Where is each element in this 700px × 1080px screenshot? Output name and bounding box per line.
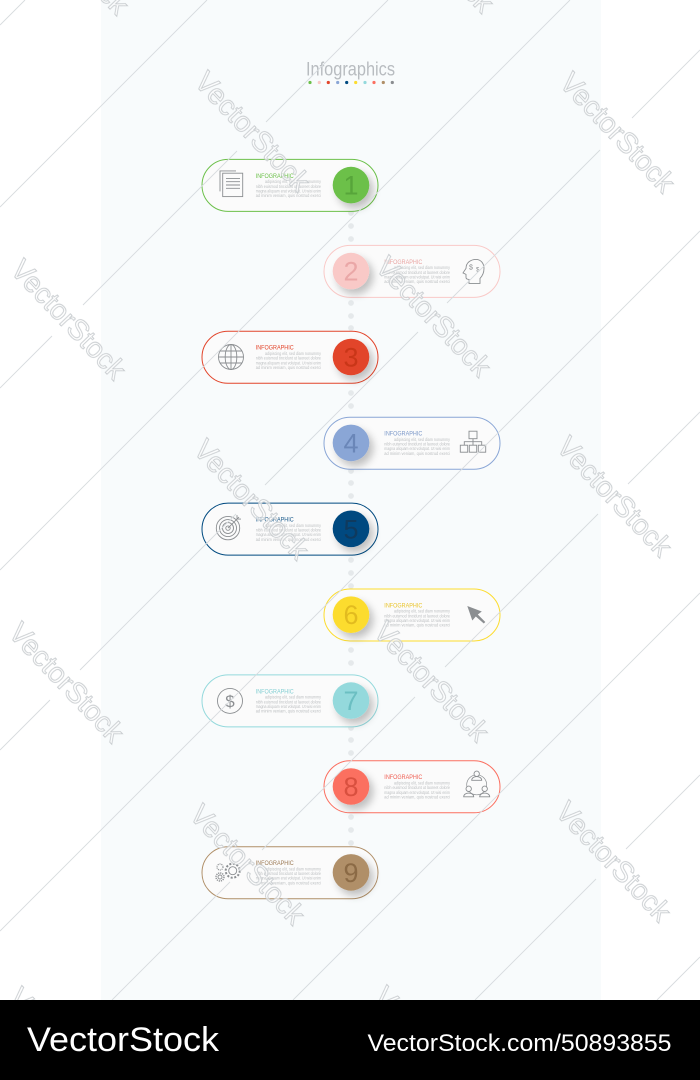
body text 9: adipiscing elit, sed diam nonummy [265,866,322,871]
watermark text repeats: VectorStock [550,431,678,564]
number badge 9 [333,854,369,891]
watermark text repeats: VectorStock [183,799,311,932]
number badge 4 [333,425,369,461]
panel: step 3 [202,331,378,383]
icon: team circle [464,771,490,797]
icon: gears [216,864,240,881]
body text 2: magna aliquam erat volutpat. Ut wisi enim [384,274,450,279]
icon: cursor arrow [467,606,485,624]
number badge 6 [333,596,369,633]
body text 9: nibh euismod tincidunt ut laoreet dolore [256,871,321,876]
icon: head with dollars [463,259,484,283]
number badge 3: 3 [343,342,359,372]
watermark text repeats: VectorStock [187,434,315,567]
body text 8 [384,780,451,800]
body text 7: ad minim veniam, quis nostrud exerci [256,709,321,714]
body text 8: ad minim veniam, quis nostrud exerci [384,794,450,799]
title colour dots [308,81,394,84]
number badge 6: 6 [343,600,359,630]
footer image id: VectorStock.com/50893855 [368,1030,672,1057]
watermark text repeats: VectorStock [369,251,497,384]
icon: dollar coin: $ [225,692,235,711]
number badge 9: 9 [343,858,359,888]
panel: step 1 [202,159,378,211]
body text 3: magna aliquam erat volutpat. Ut wisi enim [256,360,321,365]
body text 2: nibh euismod tincidunt ut laoreet dolore [384,270,450,275]
panel: step 7 [202,675,378,727]
footer bar [0,1000,700,1080]
number badge 1 [333,167,369,203]
body text 6 [384,609,451,628]
body text 9: ad minim veniam, quis nostrud exerci [256,880,321,885]
number badge 8: 8 [343,772,359,802]
body text 7: magna aliquam erat volutpat. Ut wisi enim [256,704,321,709]
number badge 5 [333,510,369,547]
body text 4: ad minim veniam, quis nostrud exerci [384,451,450,456]
watermark text repeats: VectorStock [367,616,495,749]
watermark text repeats: VectorStock [2,617,130,750]
body text 7: adipiscing elit, sed diam nonummy [265,695,322,700]
title: Infographics [306,60,395,80]
heading 2: INFOGRAPHIC [384,259,422,266]
icon: target [216,515,241,540]
body text 6: ad minim veniam, quis nostrud exerci [384,623,450,628]
heading 3: INFOGRAPHIC [256,345,294,352]
panel: step 4 [324,417,500,469]
body text 9: magna aliquam erat volutpat. Ut wisi enim [256,876,321,881]
number badge 5: 5 [343,514,359,544]
icon: documents [220,171,243,197]
body text 5 [256,523,322,542]
body text 3 [256,351,322,370]
panel: step 9 [202,847,378,899]
panel: step 5 [202,503,378,555]
panel: step 2 [324,245,500,297]
body text 9 [256,866,322,885]
body text 7 [256,695,322,714]
body text 4 [384,437,451,456]
number badge 4: 4 [343,428,359,458]
body text 7: nibh euismod tincidunt ut laoreet dolore [256,699,321,704]
heading 5: INFOGRAPHIC [256,517,294,524]
heading 4: INFOGRAPHIC [384,431,422,438]
body text 4: magna aliquam erat volutpat. Ut wisi enim [384,446,450,451]
body text 3: ad minim veniam, quis nostrud exerci [256,365,321,370]
number badge 8 [333,768,369,805]
body text 6: adipiscing elit, sed diam nonummy [394,609,451,614]
number badge 7: 7 [343,686,359,716]
body text 4: adipiscing elit, sed diam nonummy [394,437,451,442]
number badge 3 [333,339,369,375]
body text 5: adipiscing elit, sed diam nonummy [265,523,322,528]
body text 8: adipiscing elit, sed diam nonummy [394,780,451,785]
watermark text repeats: VectorStock [4,254,132,387]
heading 7: INFOGRAPHIC [256,688,294,695]
body text 6: nibh euismod tincidunt ut laoreet dolore [384,613,450,618]
panel: step 8 [324,761,500,813]
footer logo: VectorStock [27,1021,220,1059]
icon: org chart [460,431,486,452]
body text 5: nibh euismod tincidunt ut laoreet dolore [256,528,321,533]
icon: head with dollars: $ [469,264,473,271]
panel: infographic background [101,0,601,1000]
body text 8: nibh euismod tincidunt ut laoreet dolore [384,785,450,790]
dotted spine connector [348,210,354,846]
body text 2: adipiscing elit, sed diam nonummy [394,265,451,270]
body text 2: ad minim veniam, quis nostrud exerci [384,279,450,284]
watermark text repeats: VectorStock [553,67,681,200]
number badge 7 [333,682,369,719]
body text 3: nibh euismod tincidunt ut laoreet dolore [256,356,321,361]
heading 8: INFOGRAPHIC [384,774,422,781]
heading 9: INFOGRAPHIC [256,860,294,867]
icon: globe [218,344,244,370]
heading 1: INFOGRAPHIC [256,173,294,180]
body text 5: magna aliquam erat volutpat. Ut wisi enim [256,532,321,537]
body text 4: nibh euismod tincidunt ut laoreet dolore [384,442,450,447]
body text 1 [256,179,322,198]
body text 1: magna aliquam erat volutpat. Ut wisi enim [256,188,321,193]
body text 8: magna aliquam erat volutpat. Ut wisi enim [384,790,450,795]
number badge 2 [333,253,369,289]
body text 5: ad minim veniam, quis nostrud exerci [256,537,321,542]
body text 2 [384,265,451,284]
body text 3: adipiscing elit, sed diam nonummy [265,351,322,356]
watermark text repeats: VectorStock [188,66,316,199]
body text 1: adipiscing elit, sed diam nonummy [265,179,322,184]
watermark text repeats: VectorStock [549,796,677,929]
heading 6: INFOGRAPHIC [384,602,422,609]
number badge 2: 2 [343,257,359,287]
body text 1: nibh euismod tincidunt ut laoreet dolore [256,184,321,189]
icon: dollar coin [218,688,242,713]
body text 6: magna aliquam erat volutpat. Ut wisi enim [384,618,450,623]
number badge 1: 1 [343,171,359,201]
icon: head with dollars: $ [476,267,480,273]
body text 1: ad minim veniam, quis nostrud exerci [256,193,321,198]
panel: step 6 [324,589,500,641]
